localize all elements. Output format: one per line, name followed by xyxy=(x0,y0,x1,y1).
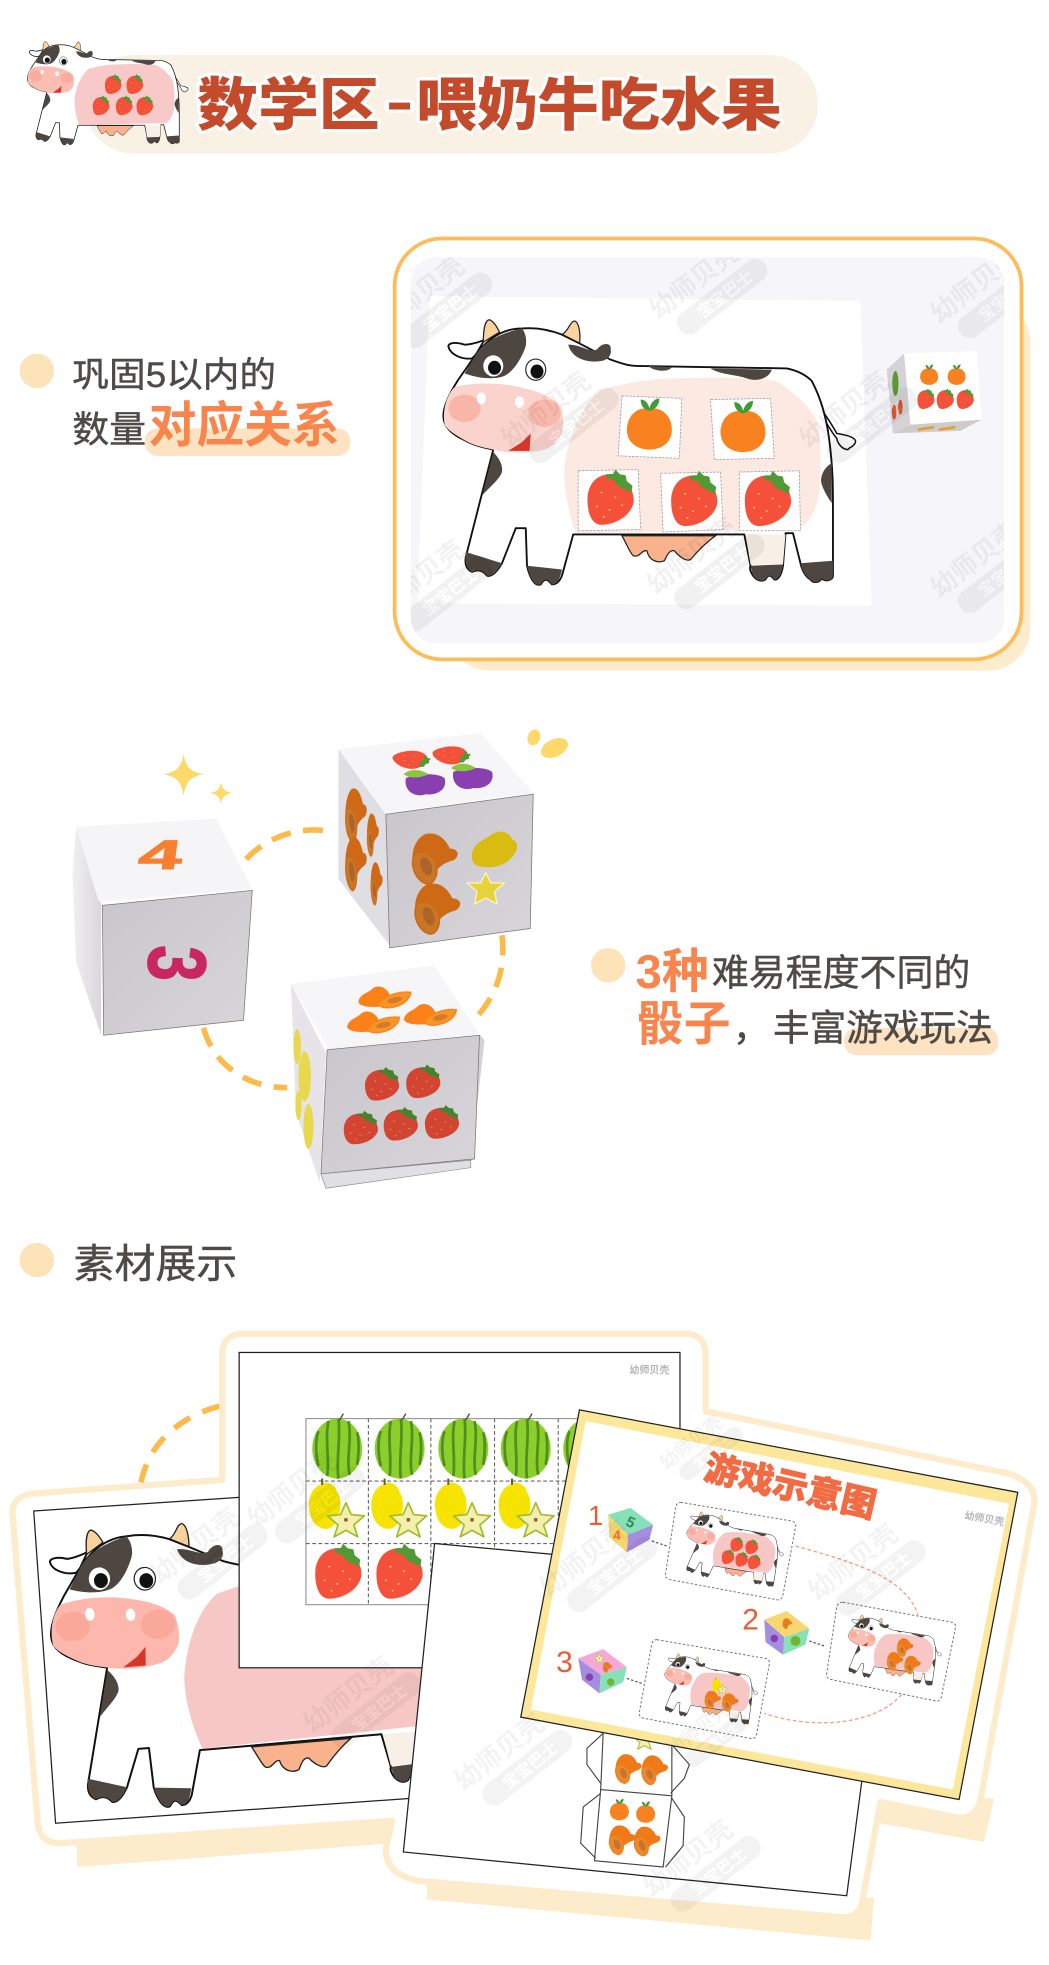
watermarks: 宝宝巴士 xyxy=(844,396,906,451)
watermarks xyxy=(411,258,1004,632)
step 1 xyxy=(588,1500,796,1600)
watermarks: 幼师贝壳 xyxy=(793,366,894,454)
watermarks: 幼师贝壳 xyxy=(298,1651,399,1739)
fruit card: strawberry one xyxy=(578,470,641,531)
paper: game diagram xyxy=(521,1410,1018,1800)
step 3: 3 xyxy=(556,1646,573,1679)
panel: materials showcase xyxy=(12,1334,1034,1941)
watermarks: 幼师贝壳 xyxy=(924,241,1026,329)
watermarks: 幼师贝壳 xyxy=(662,1699,733,1760)
dashed arcs linking dice xyxy=(204,830,503,1088)
watermarks: 宝宝巴士 xyxy=(687,1844,750,1899)
die: numbers: 3 xyxy=(130,944,224,983)
watermarks: 宝宝巴士 xyxy=(691,542,754,597)
step 1: 5 xyxy=(623,1513,638,1532)
watermarks: 宝宝巴士 xyxy=(194,1532,257,1587)
paper: die net xyxy=(403,1544,899,1896)
watermarks: 宝宝巴士 xyxy=(545,396,608,451)
watermarks: 宝宝巴士 xyxy=(697,1720,741,1759)
text: consolidate quantity correspondence: 数量 xyxy=(72,409,146,450)
row: watermelons xyxy=(312,1414,613,1479)
step 3 xyxy=(556,1640,770,1739)
sparkles xyxy=(164,728,571,804)
text: three difficulty dice: 3种 xyxy=(636,946,709,999)
watermarks: 宝宝巴士 xyxy=(694,267,756,322)
text: consolidate quantity correspondence xyxy=(72,356,350,456)
watermarks: 宝宝巴士 xyxy=(419,564,482,619)
bullet: section one xyxy=(20,354,54,388)
watermarks: 幼师贝壳 xyxy=(534,1514,635,1603)
watermarks: 幼师贝壳 xyxy=(495,366,596,454)
text: consolidate quantity correspondence: 对应关系 xyxy=(149,399,340,453)
fruit card: orange xyxy=(618,396,682,458)
paper: fruit cards xyxy=(239,1352,680,1668)
fruit card: orange two xyxy=(711,398,774,460)
title pill xyxy=(85,55,818,154)
fruit card: strawberry two xyxy=(661,471,723,532)
paper: cow template xyxy=(34,1486,504,1823)
cow on paper xyxy=(443,320,856,585)
watermarks: 幼师贝壳 xyxy=(241,1446,342,1534)
die: numbers xyxy=(72,819,252,1035)
logo mark: 幼师贝壳 xyxy=(629,1364,669,1377)
title: - xyxy=(386,70,413,134)
text: three difficulty dice: 难易程度不同的 xyxy=(712,952,970,993)
die: numbers: 4 xyxy=(136,832,186,878)
text: three difficulty dice: ， xyxy=(733,1007,769,1048)
watermarks: 幼师贝壳 xyxy=(144,1502,245,1590)
watermarks: 幼师贝壳 xyxy=(924,515,1026,604)
fruit card: strawberry three xyxy=(739,471,800,531)
watermarks: 幼师贝壳 xyxy=(656,1412,726,1473)
text: three difficulty dice: 骰子 xyxy=(637,998,731,1051)
watermarks: 宝宝巴士 xyxy=(852,1548,915,1603)
frame shadows xyxy=(76,1798,994,1941)
watermarks xyxy=(144,1406,930,1923)
bullet: section two xyxy=(591,948,625,983)
step 1: 4 xyxy=(613,1528,621,1543)
watermarks: 幼师贝壳 xyxy=(449,1708,550,1796)
watermarks: 宝宝巴士 xyxy=(499,1738,562,1793)
watermarks: 幼师贝壳 xyxy=(637,1814,738,1902)
logo mark: 幼师贝壳 xyxy=(964,1509,1005,1528)
watermarks: 幼师贝壳 xyxy=(802,1518,903,1606)
watermarks: 宝宝巴士 xyxy=(691,1432,735,1471)
text: three difficulty dice: 丰富游戏玩法 xyxy=(773,1007,993,1048)
diagram title: 游戏示意图 xyxy=(701,1447,880,1526)
title xyxy=(197,70,782,138)
watermarks: 幼师贝壳 xyxy=(641,512,742,600)
route dotted line xyxy=(764,1546,918,1723)
text: three difficulty dice xyxy=(636,946,998,1055)
row: strawberries xyxy=(315,1544,423,1599)
frame outline xyxy=(12,1334,1034,1917)
watermarks: 宝宝巴士 xyxy=(292,1476,354,1531)
step 2: 2 xyxy=(742,1604,759,1637)
icon: cow with strawberries xyxy=(27,41,188,145)
watermarks: 幼师贝壳 xyxy=(643,237,745,325)
title: 喂奶牛吃水果 xyxy=(416,74,782,138)
small die in photo xyxy=(887,351,982,433)
panel: photo of cow game xyxy=(369,228,1049,671)
watermarks: 宝宝巴士 xyxy=(975,545,1037,600)
step 2 xyxy=(742,1602,956,1701)
dashed arc behind materials xyxy=(141,1406,220,1482)
watermarks: 宝宝巴士 xyxy=(419,281,482,336)
bullet: section three xyxy=(20,1243,54,1277)
watermarks: 宝宝巴士 xyxy=(348,1681,411,1736)
watermarks: 幼师贝壳 xyxy=(369,534,470,622)
step 1: 1 xyxy=(588,1500,603,1531)
watermarks: 幼师贝壳 xyxy=(369,251,470,339)
text: consolidate quantity correspondence: 巩固5以内的 xyxy=(72,356,276,395)
die: strawberries xyxy=(291,965,485,1188)
die: fruits with grapes and papaya xyxy=(338,733,533,948)
heading: materials: 素材展示 xyxy=(74,1243,237,1287)
title: 数学区 xyxy=(197,74,380,138)
watermarks: 宝宝巴士 xyxy=(975,271,1037,326)
watermarks: 宝宝巴士 xyxy=(584,1545,647,1599)
row: star fruit xyxy=(309,1479,554,1537)
